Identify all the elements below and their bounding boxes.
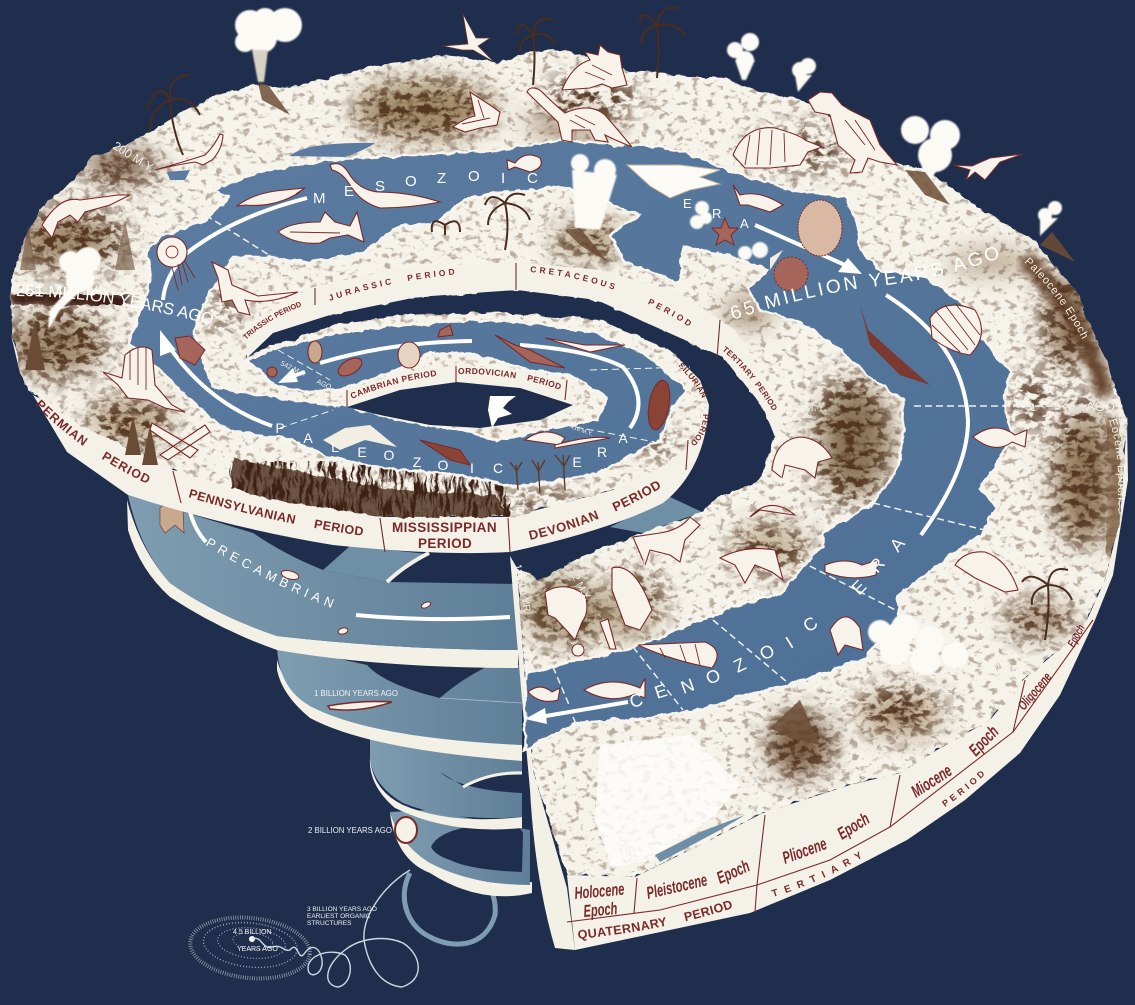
precambrian time labels <box>233 689 398 953</box>
icon: star at the origin <box>249 936 255 942</box>
small AGO labels: 200 M.Y. <box>110 139 157 175</box>
icon: ground sloth <box>612 567 652 630</box>
icon: small land dinosaur <box>155 134 223 170</box>
icon: Mesozoic sea creatures <box>712 185 842 291</box>
central hole of the spiral <box>347 382 573 428</box>
volcano smoke clouds <box>48 8 1062 675</box>
wall epoch labels: Epoch <box>714 857 753 888</box>
small AGO labels: AGO <box>315 378 333 392</box>
wall period labels: CRETACEOUS PERIOD <box>530 266 691 326</box>
wall epoch labels: Epoch <box>1066 623 1088 650</box>
era and time labels in white <box>16 168 998 712</box>
fossils on precambrian coils <box>160 503 432 843</box>
small AGO labels: AGO <box>278 257 314 286</box>
forest fine hatching <box>230 462 510 517</box>
icon: pterosaur at right <box>953 154 1023 180</box>
icon: plesiosaur <box>330 164 440 208</box>
wall period labels: PERIOD <box>692 414 709 446</box>
icon: amphibian reptile at left <box>42 195 130 238</box>
wall: Cambrian and Ordovician periods <box>347 365 573 407</box>
era and time labels in white: CENOZOIC <box>627 612 821 712</box>
small AGO labels <box>110 139 1115 867</box>
precambrian coil 2 <box>277 645 522 761</box>
carboniferous forest <box>232 458 510 517</box>
wall period labels: TERTIARY <box>771 851 860 896</box>
wall epoch labels: Holocene <box>574 880 625 904</box>
wall epoch labels: Oligocene <box>1015 669 1055 713</box>
era and time labels in white: 65 MILLION YEARS AGO <box>731 247 998 319</box>
wall period labels: CAMBRIAN PERIOD <box>350 370 436 398</box>
icon: tyrannosaur <box>808 92 897 173</box>
icon: Cenozoic fish <box>528 428 1027 701</box>
icon: Tertiary mammals <box>633 437 1018 592</box>
tail loop thin <box>252 870 418 987</box>
wall: Quaternary to Tertiary right side <box>567 420 1128 950</box>
dashed time boundaries <box>150 180 1088 738</box>
precambrian time labels: 4.5 BILLION <box>233 929 272 936</box>
era and time labels in white: ERA <box>848 534 909 599</box>
icon: flying reptile on land <box>453 92 500 132</box>
small AGO labels: 5 M.Y. <box>630 552 663 578</box>
wall period labels: DEVONIAN PERIOD <box>528 482 660 540</box>
small AGO labels: AGO <box>617 835 643 867</box>
icon: stegosaurus <box>562 45 627 90</box>
dense terrain texture in mountain and forest zones <box>10 56 1126 798</box>
wall period labels: MISSISSIPPIAN <box>392 520 497 535</box>
wall period labels: ORDOVICIAN PERIOD <box>458 368 561 389</box>
precambrian time labels: 3 BILLION YEARS AGO <box>307 906 377 913</box>
icon: small theropod <box>212 262 298 315</box>
wall epoch labels: Miocene <box>908 762 956 802</box>
icon: whale-like mosasaur <box>627 165 720 198</box>
dust spiral: 4.5 billion years ago <box>187 912 313 984</box>
precambrian time labels: STRUCTURES <box>307 920 352 927</box>
icon: mammoth <box>545 587 587 640</box>
small AGO labels: 11,500 YR. <box>511 563 534 616</box>
precambrian coil 1 with PRECAMBRIAN label <box>127 495 702 668</box>
icon: trilobite in the left sea <box>175 336 205 365</box>
icon: early humans by fire <box>572 619 616 656</box>
back-land lakes <box>167 143 375 180</box>
wall period labels: QUATERNARY PERIOD <box>578 900 732 941</box>
icon: palm trees <box>147 8 1072 640</box>
icon: big fish <box>278 212 364 243</box>
wall epoch labels: Epoch <box>583 900 618 922</box>
rim epoch labels <box>1024 257 1126 499</box>
small AGO labels: 2 M.Y. <box>569 573 593 602</box>
small AGO labels: AGO <box>732 766 760 799</box>
small AGO labels: AGO <box>1086 399 1115 414</box>
wall period labels: SILURIAN <box>679 363 707 398</box>
precambrian time labels: 2 BILLION YEARS AGO <box>308 826 392 835</box>
era and time labels in white: ERA <box>683 196 749 231</box>
small AGO labels: 34 M.Y. <box>763 475 803 489</box>
rim epoch labels: Paleocene Epoch <box>1024 257 1088 339</box>
icon: dragonfly <box>150 423 210 460</box>
precambrian time labels: YEARS AGO <box>237 946 278 953</box>
precambrian coil 4 <box>390 810 532 896</box>
wall period labels <box>36 266 984 941</box>
wall period labels: PERIOD <box>418 536 472 551</box>
icon: tusk shell <box>638 642 717 668</box>
wall epoch labels: Epoch <box>966 723 1003 760</box>
small AGO labels: 416 M.Y. <box>569 424 594 438</box>
rim epoch labels: Eocene Epoch <box>1109 418 1126 499</box>
icon: small sunfish <box>507 155 541 172</box>
small AGO labels: 56 M.Y. <box>787 400 827 414</box>
wall epoch labels: Epoch <box>834 810 873 844</box>
wall period labels: JURASSIC PERIOD <box>330 269 454 300</box>
icon: brontosaurus <box>527 88 632 147</box>
islands in the sea <box>323 250 783 450</box>
icon: pterosaur over the land <box>443 14 494 62</box>
small AGO labels: 542 M.Y. <box>279 360 307 378</box>
icon: dimetrodon <box>103 347 185 412</box>
icon: ammonite with tentacles <box>157 237 195 290</box>
precambrian time labels: 1 BILLION YEARS AGO <box>314 689 398 698</box>
wall period labels: PERMIAN PERIOD <box>36 399 150 482</box>
icon: Paleozoic sea creatures <box>267 325 673 465</box>
wall period labels: TRIASSIC PERIOD <box>242 302 301 339</box>
small AGO labels: AGO <box>991 660 1023 681</box>
icon: squid fish <box>237 188 305 206</box>
shaded terrain patches <box>10 82 1113 775</box>
era and time labels in white: 251 MILLION YEARS AGO <box>16 284 213 324</box>
icon: giant squid <box>860 305 930 385</box>
small AGO labels: 23 M.Y. <box>708 522 744 534</box>
icon: earliest volcano smoke in the center <box>488 396 516 428</box>
wall period labels: PENNSYLVANIAN PERIOD <box>188 489 363 536</box>
era and time labels in white: ERA <box>572 430 628 470</box>
panel: sea spiral <box>128 140 1013 750</box>
icon: large shell <box>930 303 981 355</box>
icon: conifer trees <box>20 220 158 465</box>
glacier patch <box>595 735 740 868</box>
icon: volcano silhouettes <box>258 83 1075 745</box>
wall epoch labels <box>574 623 1088 922</box>
cut face of the wedge <box>510 556 575 950</box>
label: Precambrian: PRECAMBRIAN <box>206 538 334 608</box>
sea arrows <box>160 198 968 724</box>
precambrian coil 3 <box>370 735 522 829</box>
icon: triceratops <box>733 128 822 168</box>
wall period labels: TERTIARY PERIOD <box>724 346 776 410</box>
glacier meltwater streak <box>655 815 745 862</box>
wall: Triassic to Tertiary periods <box>245 262 783 437</box>
wall: Permian to Devonian front <box>11 335 709 553</box>
wall epoch labels: Pleistocene <box>645 871 709 904</box>
icon: Devonian trees <box>510 455 570 493</box>
wall epoch labels: Pliocene <box>780 835 830 868</box>
dark band behind 251 million label <box>10 296 130 304</box>
wall divider lines <box>173 263 1093 922</box>
tail loop thick <box>404 873 495 944</box>
precambrian time labels: EARLIEST ORGANIC <box>307 913 371 920</box>
brown band behind Paleocene label <box>1024 258 1105 396</box>
era and time labels in white: MESOZOIC <box>313 168 538 207</box>
era and time labels in white: PALEOZOIC <box>275 420 503 476</box>
small AGO labels: AGO <box>1070 554 1099 569</box>
tan band behind Eocene label <box>1108 420 1118 555</box>
wall period labels: PERIOD <box>942 771 984 807</box>
